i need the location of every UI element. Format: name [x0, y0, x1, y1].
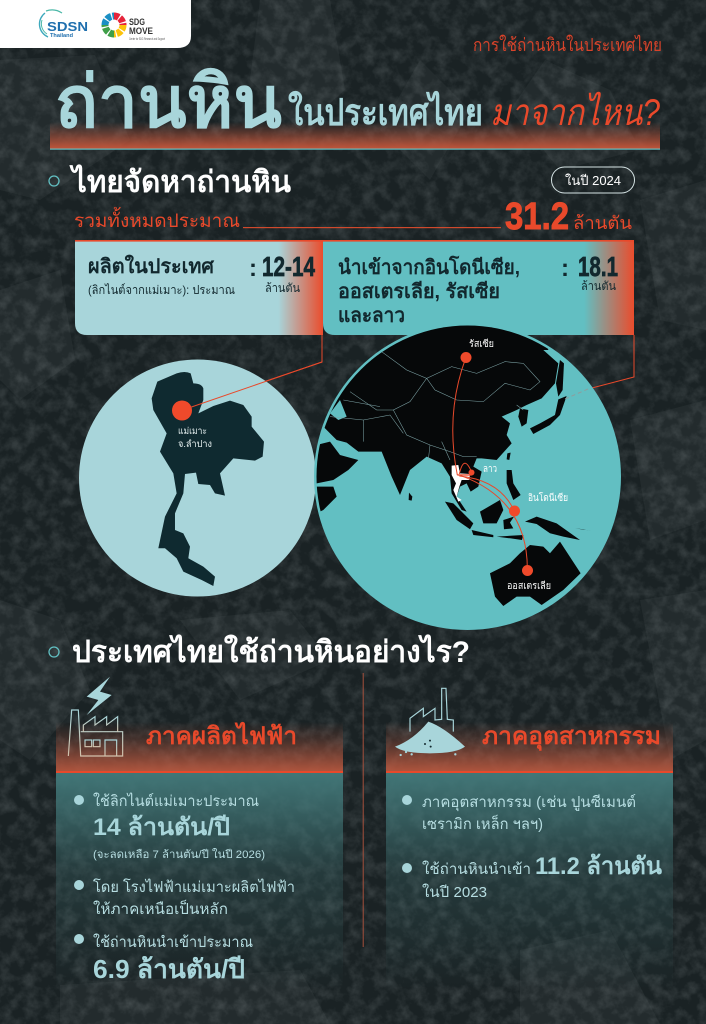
panel: imports: ออสเตรเลีย, รัสเซีย — [338, 280, 500, 303]
logo: SDSN Thailand — [39, 10, 88, 39]
marker: Mae Moh — [172, 400, 192, 420]
logo: SDG Move: SDG — [129, 17, 145, 28]
bullet: lignite use — [74, 792, 265, 861]
bullet: Mae Moh plant — [74, 878, 295, 918]
icon: factory with powder pile — [395, 688, 465, 756]
title word: coal: ถ่านหิน — [55, 63, 282, 143]
bullet: industries — [402, 794, 636, 833]
total supply — [74, 196, 632, 238]
panel: industry sector — [386, 688, 673, 990]
logo card — [0, 0, 191, 48]
logo: SDG Move: Center for SDG Research and Support — [129, 37, 165, 41]
bullet: industries: ภาคอุตสาหกรรม (เช่น ปูนซีเมนต์ — [422, 794, 636, 812]
logo: SDG Move — [105, 16, 165, 41]
panel: electricity sector — [56, 677, 343, 990]
logo: SDSN Thailand: Thailand — [50, 33, 73, 39]
bullet: lignite use: 14 ล้านตัน/ปี — [93, 814, 230, 841]
bullet: Mae Moh plant: โดย โรงไฟฟ้าแม่เมาะผลิตไฟฟ้า — [93, 878, 295, 896]
leader dashed — [565, 389, 588, 399]
total supply: รวมทั้งหมดประมาณ — [74, 207, 240, 232]
section 2 heading: ประเทศไทยใช้ถ่านหินอย่างไร? — [72, 634, 470, 669]
connector: domestic to Thailand map — [181, 335, 322, 410]
topic label: การใช้ถ่านหินในประเทศไทย — [473, 34, 662, 55]
panel: imports: 18.1 — [578, 251, 618, 282]
total supply: ล้านตัน — [573, 213, 632, 233]
marker: Indonesia — [509, 506, 520, 516]
panel: domestic production: 12-14 — [262, 251, 315, 282]
year pill — [552, 167, 634, 193]
panel: imports: : — [561, 255, 569, 282]
title: in Thailand: ในประเทศไทย — [288, 90, 483, 133]
bullet: imported coal — [74, 933, 253, 984]
label: Mae Moh — [178, 426, 212, 450]
panel: domestic production: ผลิตในประเทศ — [88, 254, 215, 278]
map: Asia Pacific globe — [310, 320, 621, 630]
panel: domestic production: : — [249, 255, 257, 282]
panel: domestic production: (ลิกไนต์จากแม่เมาะ): ประมาณ — [88, 283, 235, 297]
panel: domestic production — [75, 240, 323, 335]
title: from where: มาจากไหน? — [490, 91, 660, 133]
bullet: imported coal: 11.2 ล้านตัน — [535, 853, 663, 880]
panel: imports: ล้านตัน — [581, 279, 616, 293]
Thailand shape — [152, 372, 264, 586]
panel: domestic production: ล้านตัน — [265, 281, 300, 295]
connector: imports to world map — [588, 335, 634, 389]
routes — [453, 357, 527, 571]
label: Mae Moh: แม่เมาะ — [178, 426, 207, 437]
marker: Russia — [460, 352, 472, 363]
label: Russia: รัสเซีย — [469, 338, 494, 350]
panel: imports: นำเข้าจากอินโดนีเซีย, — [338, 255, 520, 279]
heading: ภาคผลิตไฟฟ้า — [146, 721, 297, 750]
panel: imports — [323, 240, 634, 335]
bullet: lignite use: ใช้ลิกไนต์แม่เมาะประมาณ — [93, 792, 259, 810]
label: Mae Moh: จ.ลำปาง — [178, 439, 212, 450]
marker: Laos — [468, 470, 474, 476]
year pill: ในปี 2024 — [565, 173, 621, 188]
bullet: imported coal: 6.9 ล้านตัน/ปี — [93, 954, 245, 984]
bullet: Mae Moh plant: ให้ภาคเหนือเป็นหลัก — [93, 899, 228, 918]
logo: SDG Move: MOVE — [129, 26, 153, 37]
icon: factory with lightning — [68, 677, 123, 756]
section 1 heading: ไทยจัดหาถ่านหิน — [69, 164, 291, 199]
label: Laos: ลาว — [483, 464, 497, 475]
land masses — [310, 320, 593, 606]
label: Australia: ออสเตรเลีย — [507, 580, 551, 592]
bullet: industries: เซรามิก เหล็ก ฯลฯ) — [422, 814, 543, 833]
title banner — [50, 63, 660, 150]
bullet: imported coal: ใช้ถ่านหินนำเข้า — [422, 860, 531, 878]
bullet: imported coal: ใช้ถ่านหินนำเข้าประมาณ — [93, 933, 253, 951]
bullet: imported coal — [402, 853, 663, 901]
panel: imports: และลาว — [338, 305, 405, 327]
connector: Mae Moh marker to panel — [190, 362, 322, 408]
logo: SDSN Thailand: SDSN — [47, 19, 88, 34]
heading: ภาคอุตสาหกรรม — [482, 723, 661, 752]
marker: Australia — [522, 565, 533, 576]
total supply: 31.2 — [505, 196, 569, 238]
bullet: lignite use: (จะลดเหลือ 7 ล้านตัน/ปี ในปี 2026) — [93, 848, 265, 861]
label: Indonesia: อินโดนีเซีย — [528, 491, 568, 504]
map: Thailand — [79, 360, 316, 596]
bullet: imported coal: ในปี 2023 — [422, 883, 487, 901]
